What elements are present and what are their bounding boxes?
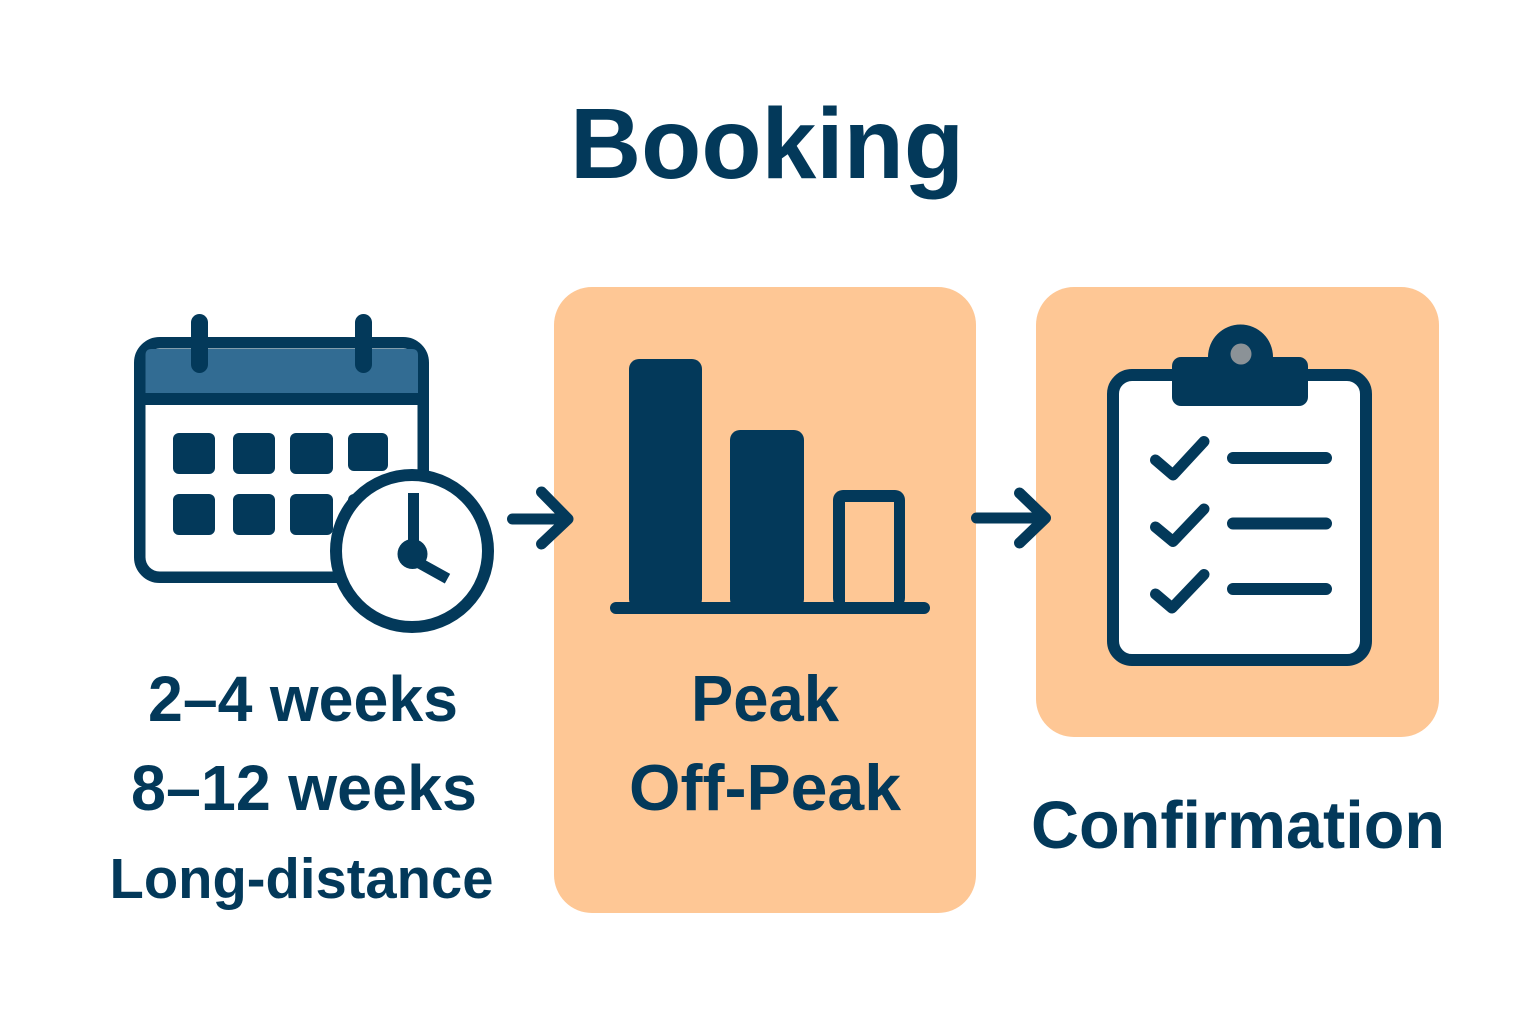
icon: bar chart	[610, 359, 930, 614]
panel: confirmation	[1036, 287, 1439, 737]
text: lead times: 8–12 weeks	[131, 752, 477, 824]
icon: clock	[336, 475, 488, 627]
title: Booking	[570, 88, 964, 200]
text: lead times: 2–4 weeks	[148, 663, 458, 735]
panel: peak and off-peak	[554, 287, 976, 913]
icon: calendar with clock	[139, 314, 488, 627]
confirmation label: Confirmation	[1031, 788, 1445, 863]
arrow: calendar to chart	[512, 492, 568, 544]
off-peak label: Off-Peak	[629, 751, 902, 824]
text: lead times: Long-distance	[110, 847, 494, 911]
peak label: Peak	[691, 662, 840, 735]
text: lead times	[110, 663, 494, 911]
arrow: chart to clipboard	[976, 493, 1046, 543]
icon: clipboard checklist	[1113, 324, 1366, 660]
